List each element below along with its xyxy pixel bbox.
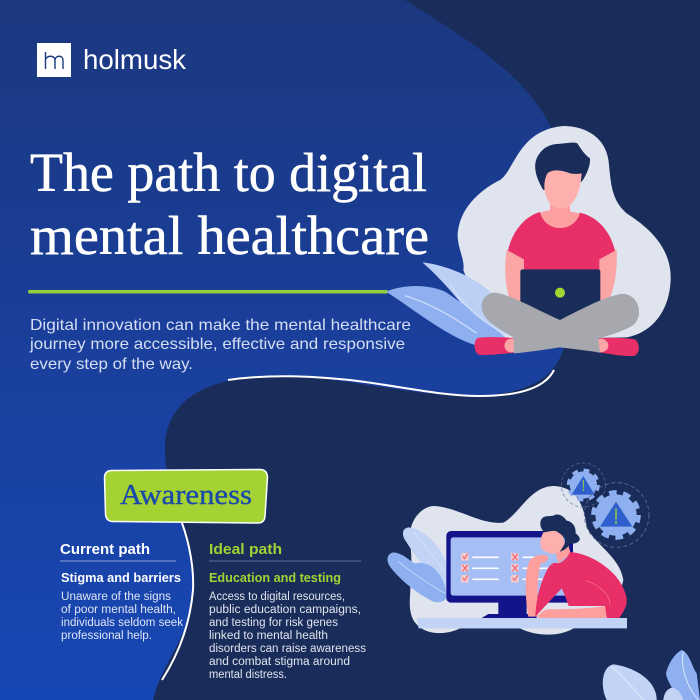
ideal path body: public education campaigns,	[209, 604, 361, 616]
current path body: professional help.	[61, 630, 152, 642]
intro text: every step of the way.	[30, 356, 193, 373]
forearm and hand	[526, 555, 548, 617]
title: The path to digital	[30, 142, 427, 203]
small gear with warning	[561, 463, 605, 507]
white curve under intro	[228, 370, 554, 396]
checklist	[461, 553, 548, 583]
intro text	[29, 317, 411, 373]
intro text: Digital innovation can make the mental healthcare	[30, 317, 411, 334]
laptop	[520, 269, 600, 321]
seated person	[526, 515, 627, 618]
ideal path column	[209, 542, 366, 681]
ideal path body: linked to mental health	[209, 630, 328, 642]
left arm	[505, 250, 527, 307]
shirt	[508, 212, 615, 270]
white divider curve between paths	[162, 523, 193, 680]
lower arm on desk	[538, 606, 606, 618]
neck and collar skin	[540, 200, 580, 228]
corner leaves bottom right	[603, 650, 700, 700]
green divider line	[28, 290, 388, 294]
illustration: person at monitor	[388, 463, 649, 635]
ideal path heading: Ideal path	[209, 542, 282, 558]
blob behind person	[458, 126, 671, 340]
ideal path body: disorders can raise awareness	[209, 643, 366, 655]
illustration: person with laptop	[386, 126, 671, 356]
current path body: of poor mental health,	[61, 604, 176, 616]
front leaf	[386, 286, 507, 345]
hair	[540, 515, 580, 552]
right arm	[593, 250, 617, 307]
large gear with warning	[584, 483, 649, 547]
hair	[535, 143, 590, 190]
desk	[417, 618, 627, 628]
ideal path body: and combat stigma around	[209, 656, 350, 668]
logo	[37, 43, 187, 77]
ideal path body	[209, 591, 366, 681]
back leaf	[422, 262, 513, 337]
title: mental healthcare	[30, 205, 429, 266]
Awareness tag	[104, 470, 268, 523]
current path heading: Current path	[60, 542, 150, 558]
leaf veins	[405, 284, 513, 337]
intro text: journey more accessible, effective and responsive	[29, 336, 405, 353]
blob behind monitor	[410, 486, 623, 635]
monitor stand	[482, 600, 537, 618]
ideal path body: and testing for risk genes	[209, 617, 338, 629]
neck	[555, 540, 571, 563]
monitor frame	[446, 531, 573, 603]
head	[540, 530, 564, 554]
shirt fold	[586, 581, 610, 605]
ideal path body: mental distress.	[209, 669, 287, 681]
current path subheading: Stigma and barriers	[61, 571, 181, 585]
left shoe	[474, 337, 517, 355]
current path body: individuals seldom seek	[61, 617, 183, 629]
Awareness tag: Awareness	[120, 479, 252, 511]
current path body	[61, 591, 183, 642]
monitor screen	[451, 537, 569, 596]
ideal path body: Access to digital resources,	[209, 591, 345, 603]
laptop green dot	[555, 288, 565, 298]
current path body: Unaware of the signs	[61, 591, 171, 603]
title	[30, 142, 429, 266]
crossed legs	[482, 293, 639, 353]
shirt	[535, 552, 627, 618]
ankles	[504, 339, 608, 352]
right shoe	[600, 338, 639, 356]
current path column	[60, 542, 183, 642]
face	[544, 170, 582, 209]
leaves	[388, 527, 448, 602]
logo: holmusk	[83, 44, 187, 75]
ideal path subheading: Education and testing	[209, 571, 341, 585]
